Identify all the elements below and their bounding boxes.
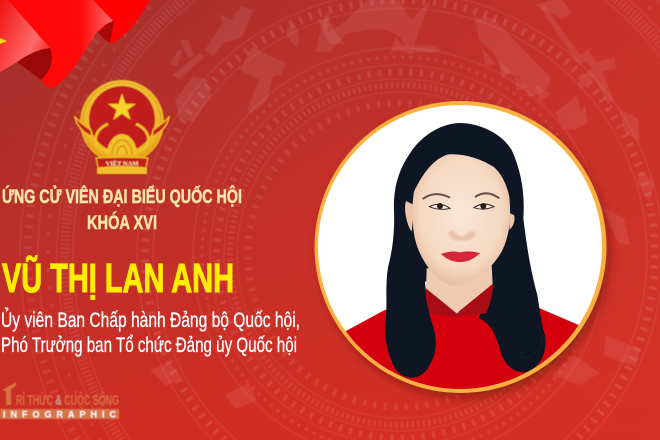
candidate name: VŨ THỊ LAN ANH [2,255,234,301]
position line one: Ủy viên Ban Chấp hành Đảng bộ Quốc hội, [1,308,300,332]
ears [405,201,515,232]
emblem banner [96,157,148,168]
brows [423,193,499,199]
lips [441,251,480,262]
ribbon left piece [0,0,50,72]
ribbon middle fold [17,48,53,80]
ribbon right piece [90,0,150,43]
heading line one: ỨNG CỬ VIÊN ĐẠI BIỂU QUỐC HỘI [2,186,242,208]
emblem base [97,166,147,174]
nose shading [448,231,476,241]
ribbon middle piece [6,0,113,88]
portrait of the candidate [346,123,578,389]
emblem label: VIỆT NAM [106,160,138,168]
logo big T [2,382,16,405]
portrait photo frame [314,101,606,395]
ribbon right fold [98,21,114,43]
heading line two: KHÓA XVI [87,212,157,234]
flag star [0,38,7,44]
neck [426,265,493,313]
photo drop shadow [319,107,609,397]
logo band [0,409,119,419]
logo wordmark: RÍ THỨC & CUỘC SỐNG [16,391,119,409]
hair curl [521,325,542,358]
face [412,154,510,286]
publisher logo [0,382,119,420]
emblem star [108,94,136,120]
emblem wheat [96,124,148,152]
emblem side bands [75,117,169,137]
drum motifs [150,0,654,409]
collar [426,283,493,318]
emblem gear [107,134,137,154]
national emblem [75,80,169,174]
flag ribbon [0,0,150,88]
logo band text: INFOGRAPHIC [3,410,116,420]
eyes [429,204,494,209]
hair [385,123,546,378]
position line two: Phó Trưởng ban Tổ chức Đảng ủy Quốc hội [1,334,297,357]
dress [346,306,578,389]
